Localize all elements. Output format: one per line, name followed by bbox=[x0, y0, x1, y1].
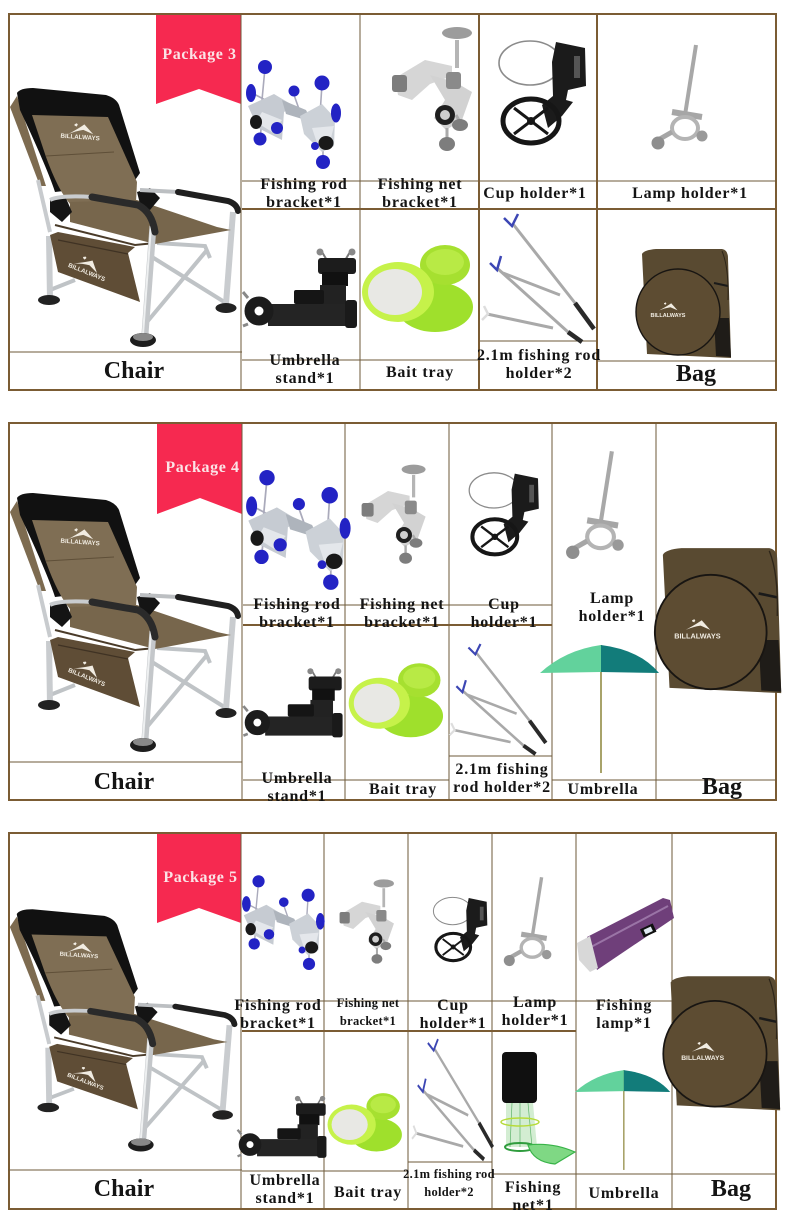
icon: bag bbox=[655, 548, 781, 693]
labels: package 4 bbox=[94, 590, 742, 805]
labels: package 4: Bait tray bbox=[369, 781, 437, 798]
icon: lamp holder bbox=[566, 451, 624, 559]
chair photo: BILLALWAYS bbox=[67, 667, 106, 688]
labels: package 3: Bag bbox=[676, 361, 716, 387]
icon: fishing net bracket bbox=[340, 879, 394, 964]
labels: package 5: Lamp bbox=[513, 994, 557, 1011]
labels: package 4: rod holder*2 bbox=[453, 779, 551, 796]
labels: package 5: holder*1 bbox=[502, 1012, 568, 1029]
table grid lines bbox=[9, 14, 776, 390]
icon: bag: BILLALWAYS bbox=[651, 313, 686, 319]
table grid lines bbox=[8, 833, 776, 1209]
panel: package 5 bbox=[8, 833, 780, 1214]
panel: package 3 bbox=[9, 14, 776, 390]
icon: umbrella bbox=[540, 645, 659, 773]
labels: package 5: holder*2 bbox=[424, 1185, 474, 1199]
icon: fishing net bracket bbox=[392, 27, 472, 151]
labels: package 5: Fishing rod bbox=[234, 997, 322, 1014]
package 3 ribbon bbox=[156, 14, 241, 104]
icon: cup holder bbox=[469, 473, 539, 554]
chair photo: BILLALWAYS bbox=[60, 133, 100, 142]
labels: package 5: Bait tray bbox=[334, 1184, 402, 1201]
icon: bag bbox=[636, 249, 731, 358]
labels: package 5: Fishing bbox=[505, 1179, 561, 1196]
labels: package 3: Cup holder*1 bbox=[483, 185, 587, 202]
labels: package 4: stand*1 bbox=[268, 788, 326, 805]
labels: package 4: Cup bbox=[488, 596, 520, 613]
labels: package 5: Chair bbox=[94, 1176, 154, 1202]
labels: package 3: Bait tray bbox=[386, 364, 454, 381]
labels: package 5 bbox=[94, 994, 751, 1214]
icon: bag bbox=[663, 976, 780, 1110]
labels: package 4: Lamp bbox=[590, 590, 634, 607]
icon: umbrella stand bbox=[238, 1096, 326, 1158]
labels: package 5: Cup bbox=[437, 997, 469, 1014]
table grid lines bbox=[8, 423, 776, 800]
icon: rod holder bbox=[482, 214, 594, 342]
icon: bait tray bbox=[328, 1093, 402, 1151]
chair photo bbox=[10, 909, 234, 1151]
labels: package 4: bracket*1 bbox=[364, 614, 440, 631]
package 4 ribbon bbox=[157, 424, 242, 514]
icon: cup holder bbox=[499, 41, 586, 143]
labels: package 4: Bag bbox=[702, 774, 742, 800]
labels: package 3: stand*1 bbox=[276, 370, 334, 387]
labels: package 4: holder*1 bbox=[579, 608, 645, 625]
labels: package 5: stand*1 bbox=[256, 1190, 314, 1207]
labels: package 3: Fishing rod bbox=[260, 176, 348, 193]
panel: package 4 bbox=[8, 423, 781, 805]
labels: package 5: Umbrella bbox=[588, 1185, 660, 1202]
package 4 ribbon: Package 4 bbox=[165, 459, 240, 476]
icon: lamp holder bbox=[504, 877, 551, 966]
package 5 ribbon: Package 5 bbox=[163, 869, 238, 886]
labels: package 5: holder*1 bbox=[420, 1015, 486, 1032]
icon: umbrella bbox=[575, 1070, 670, 1170]
icon: bait tray bbox=[349, 663, 443, 737]
icon: cup holder bbox=[433, 897, 487, 961]
labels: package 4: bracket*1 bbox=[259, 614, 335, 631]
labels: package 3: Lamp holder*1 bbox=[632, 185, 748, 202]
labels: package 4: Fishing net bbox=[360, 596, 444, 613]
chair photo: BILLALWAYS bbox=[60, 538, 100, 547]
labels: package 4: Umbrella bbox=[568, 781, 638, 798]
labels: package 4: holder*1 bbox=[471, 614, 537, 631]
labels: package 5: 2.1m fishing rod bbox=[403, 1167, 495, 1181]
labels: package 5: Fishing bbox=[596, 997, 652, 1014]
icon: rod holder bbox=[412, 1039, 493, 1159]
labels: package 3: bracket*1 bbox=[266, 194, 342, 211]
chair photo: BILLALWAYS bbox=[59, 952, 98, 960]
labels: package 3 bbox=[104, 176, 748, 387]
icon: fishing lamp bbox=[577, 898, 674, 972]
chair photo: BILLALWAYS bbox=[66, 1073, 104, 1092]
labels: package 5: Fishing net bbox=[337, 996, 400, 1010]
chair photo bbox=[10, 493, 238, 752]
package 5 ribbon bbox=[157, 834, 241, 923]
labels: package 3: Fishing net bbox=[378, 176, 462, 193]
icon: lamp holder bbox=[652, 45, 708, 150]
icon: umbrella stand bbox=[243, 668, 343, 737]
labels: package 5: lamp*1 bbox=[596, 1015, 652, 1032]
icon: fishing net bbox=[501, 1052, 575, 1164]
chair photo bbox=[10, 88, 238, 347]
labels: package 5: net*1 bbox=[512, 1197, 554, 1214]
labels: package 3: 2.1m fishing rod bbox=[477, 347, 601, 364]
package 3 ribbon: Package 3 bbox=[162, 46, 237, 63]
labels: package 5: bracket*1 bbox=[240, 1015, 316, 1032]
labels: package 3: Umbrella bbox=[270, 352, 340, 369]
labels: package 4: Fishing rod bbox=[253, 596, 341, 613]
icon: fishing rod bracket bbox=[246, 60, 341, 169]
labels: package 3: Chair bbox=[104, 358, 164, 384]
icon: bait tray bbox=[362, 245, 473, 332]
labels: package 4: Umbrella bbox=[262, 770, 332, 787]
icon: bag: BILLALWAYS bbox=[681, 1055, 725, 1062]
icon: fishing rod bracket bbox=[242, 875, 325, 970]
labels: package 3: bracket*1 bbox=[382, 194, 458, 211]
icon: rod holder bbox=[450, 644, 546, 754]
chair photo: BILLALWAYS bbox=[67, 262, 106, 283]
labels: package 3: holder*2 bbox=[506, 365, 572, 382]
labels: package 5: Bag bbox=[711, 1176, 751, 1202]
labels: package 4: 2.1m fishing bbox=[455, 761, 549, 778]
icon: umbrella stand bbox=[243, 248, 357, 328]
labels: package 4: Chair bbox=[94, 769, 154, 795]
icon: bag: BILLALWAYS bbox=[674, 632, 721, 641]
labels: package 5: Umbrella bbox=[250, 1172, 320, 1189]
labels: package 5: bracket*1 bbox=[340, 1014, 396, 1028]
icon: fishing net bracket bbox=[362, 465, 426, 564]
icon: fishing rod bracket bbox=[246, 470, 351, 590]
